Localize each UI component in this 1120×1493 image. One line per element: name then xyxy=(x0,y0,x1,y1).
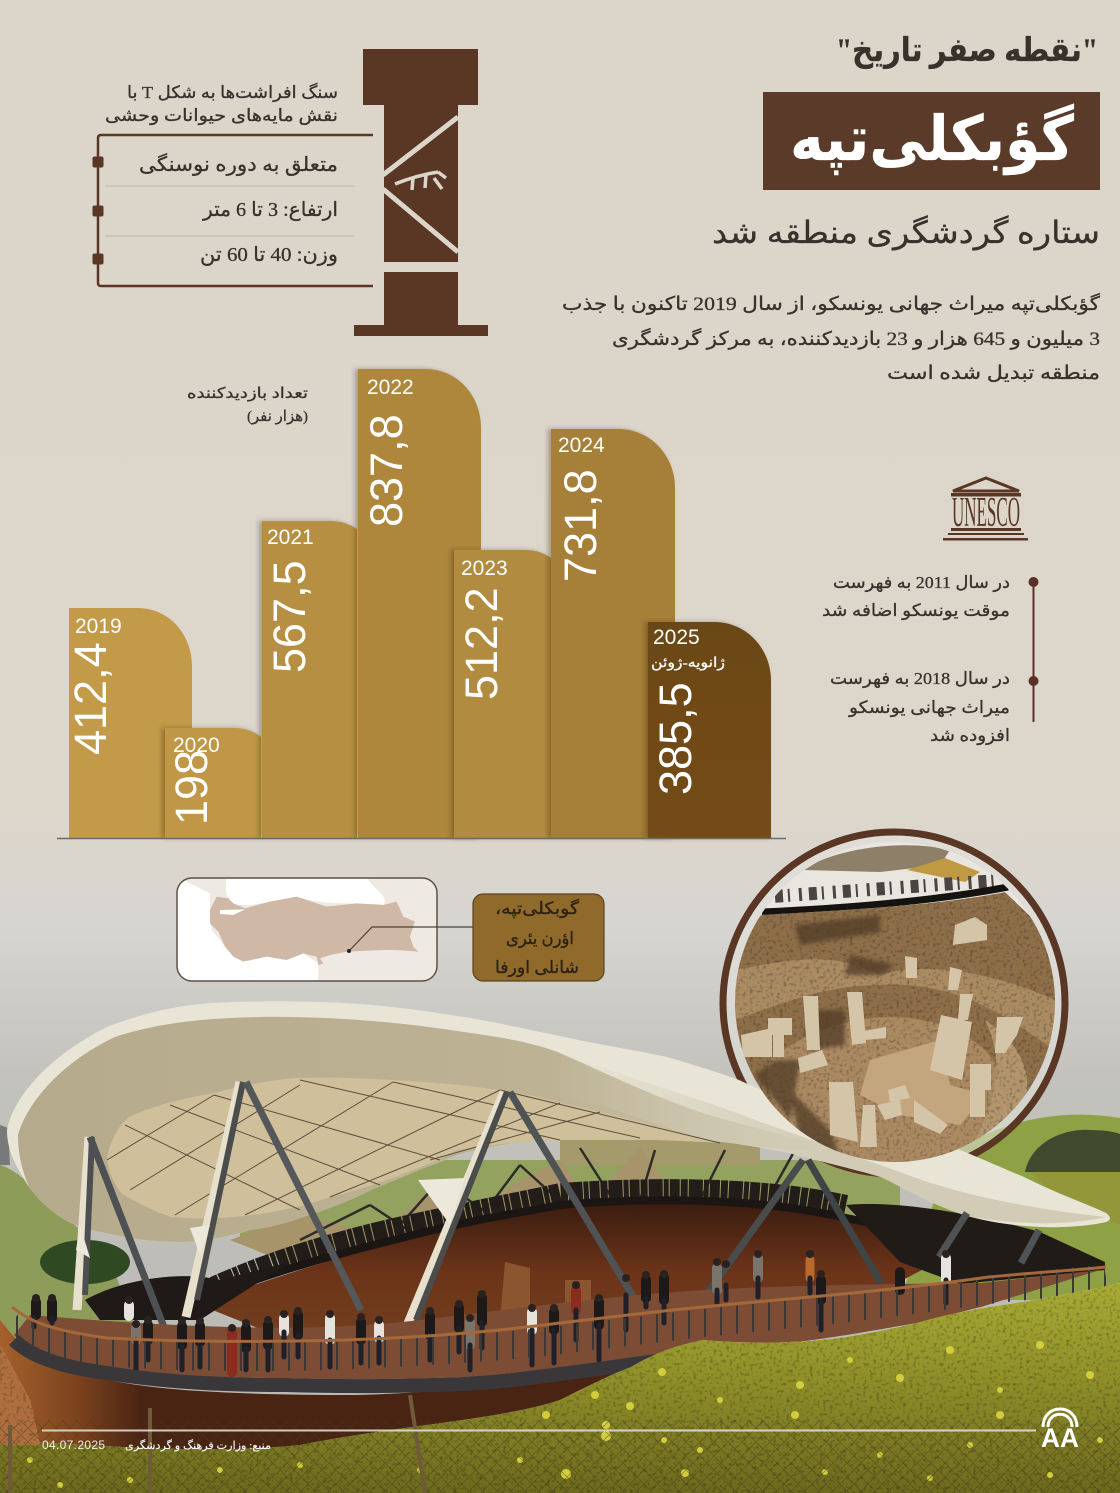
footer source: منبع: وزارت فرهنگ و گردشگری xyxy=(125,1439,271,1452)
location callout: اؤرن یئری xyxy=(506,929,574,948)
roof support columns xyxy=(76,1082,1039,1333)
yellow wildflowers xyxy=(27,1341,1103,1488)
icon: Anadolu Agency logo xyxy=(1041,1409,1079,1453)
intro paragraph xyxy=(562,292,1101,384)
ring around inset photo xyxy=(723,832,1065,1174)
far membranes xyxy=(230,1148,795,1280)
chart unit label xyxy=(187,386,308,425)
chart axis xyxy=(57,838,786,840)
footer date: 04.07.2025 xyxy=(42,1438,105,1452)
inset walkway xyxy=(762,880,1008,912)
inset canopy xyxy=(803,845,950,872)
bar chart: visitors per year xyxy=(57,369,786,838)
bar 2022: 837,8 xyxy=(361,414,412,527)
bar 2024 xyxy=(551,429,675,838)
bar 2019 xyxy=(65,608,192,838)
bar 2021 xyxy=(262,521,357,838)
bar 2023: 2023 xyxy=(461,557,508,580)
timeline entry 2018: میراث جهانی یونسکو xyxy=(848,698,1010,718)
far side crowd xyxy=(846,1204,1105,1284)
pillar facts text: متعلق به دوره نوسنگی xyxy=(139,153,338,176)
timeline entry 2018: در سال 2018 به فهرست xyxy=(830,669,1010,689)
Mediterranean xyxy=(177,877,318,983)
timeline entry 2011: در سال 2011 به فهرست xyxy=(833,573,1010,593)
icon: T-shaped pillar xyxy=(354,49,488,336)
roof underside xyxy=(18,1017,830,1242)
pillar description: نقش مایه‌های حیوانات وحشی xyxy=(105,106,338,125)
icon: UNESCO temple logo xyxy=(943,478,1028,540)
bar 2023: 512,2 xyxy=(456,587,507,700)
chart unit label: (هزار نفر) xyxy=(247,409,308,425)
intro paragraph: منطقه تبدیل شده است xyxy=(887,363,1100,384)
pillar description xyxy=(105,82,338,125)
hills xyxy=(0,1115,1120,1340)
lower walkway floor xyxy=(14,1270,1100,1379)
bar 2020: 198 xyxy=(166,750,217,825)
bar 2022 xyxy=(358,369,481,838)
title text: گؤبکلی‌تپه xyxy=(790,103,1075,175)
pillar description: سنگ افراشت‌ها به شکل T با xyxy=(127,82,338,102)
inset T-pillars xyxy=(741,917,1023,1147)
soil below walkway xyxy=(0,1320,640,1460)
bar 2025: 385,5 xyxy=(650,682,701,795)
timeline entry 2011 xyxy=(822,573,1010,620)
inset dark shadows xyxy=(755,915,895,1155)
timeline entry 2011: موقت یونسکو اضافه شد xyxy=(822,601,1010,620)
pillar facts bracket xyxy=(92,135,373,286)
walkway side band, railing and posts xyxy=(12,1267,1106,1386)
visitors on lower walkway xyxy=(32,1250,950,1372)
bar 2019: 2019 xyxy=(75,615,122,638)
bar 2022: 2022 xyxy=(367,376,414,399)
UNESCO timeline xyxy=(822,573,1038,745)
Turkey landmass xyxy=(210,897,418,965)
bar 2024: 2024 xyxy=(558,434,605,457)
excavation pit xyxy=(200,1202,960,1345)
column pair A xyxy=(77,1137,89,1310)
fabric fins xyxy=(76,1178,465,1258)
chain link fence xyxy=(0,1395,1120,1493)
timeline entry 2018: افزوده شد xyxy=(930,726,1010,745)
pillar facts text xyxy=(139,153,338,266)
footer rule xyxy=(42,1430,1036,1432)
column pair C xyxy=(404,1092,504,1333)
location callout: شانلی اورفا xyxy=(495,958,579,977)
bar 2019: 412,4 xyxy=(65,642,116,755)
photo: pavilion at Gobeklitepe xyxy=(0,832,1120,1493)
yellow-green grass foreground xyxy=(0,1283,1120,1493)
Black Sea xyxy=(226,877,385,905)
bar 2020: 2020 xyxy=(173,734,220,757)
inset photo: excavation site xyxy=(735,842,1055,1164)
bar 2025: ژانویه-ژوئن xyxy=(651,656,725,671)
upper walkway with crowd xyxy=(204,1189,953,1300)
pillar facts text: وزن: 40 تا 60 تن xyxy=(200,244,338,266)
bar 2023 xyxy=(454,550,551,838)
bar 2025 xyxy=(648,622,771,838)
intro paragraph: گؤبکلی‌تپه میراث جهانی یونسکو، از سال 2019 تاکنون با جذب xyxy=(562,292,1101,315)
pillar facts text: ارتفاع: 3 تا 6 متر xyxy=(202,199,338,221)
subtitle: ستاره گردشگری منطقه شد xyxy=(712,215,1100,251)
location leader line xyxy=(347,927,473,953)
bar 2025: 2025 xyxy=(653,626,700,649)
title box xyxy=(763,92,1100,190)
roof canopy xyxy=(7,1001,1110,1242)
roof mesh panel xyxy=(107,1078,720,1218)
location callout: گوبکلی‌تپه، xyxy=(495,898,580,919)
text: UNESCO xyxy=(952,490,1020,536)
excavated stones in pit xyxy=(500,1262,591,1320)
column pair B xyxy=(186,1082,240,1317)
column pair D xyxy=(681,1160,803,1330)
timeline entry 2018 xyxy=(830,669,1010,745)
chart unit label: تعداد بازدیدکننده xyxy=(187,386,308,402)
bar 2021: 2021 xyxy=(267,526,314,549)
bar 2020 xyxy=(165,728,261,838)
map of Turkey panel xyxy=(177,877,437,983)
bar 2024: 731,8 xyxy=(555,469,606,582)
inset sandy floor xyxy=(860,1042,970,1125)
inset earth and walls xyxy=(735,892,1055,1164)
left crowd mass xyxy=(85,1262,290,1320)
icon: Anadolu Agency logo: AA xyxy=(1041,1423,1079,1453)
intro paragraph: 3 میلیون و 645 هزار و 23 بازدیدکننده، به مرکز گردشگری xyxy=(612,327,1100,350)
location callout xyxy=(473,894,604,981)
roof outer rim xyxy=(7,1001,1110,1242)
icon: animal relief xyxy=(395,172,446,190)
bar 2021: 567,5 xyxy=(264,560,315,673)
